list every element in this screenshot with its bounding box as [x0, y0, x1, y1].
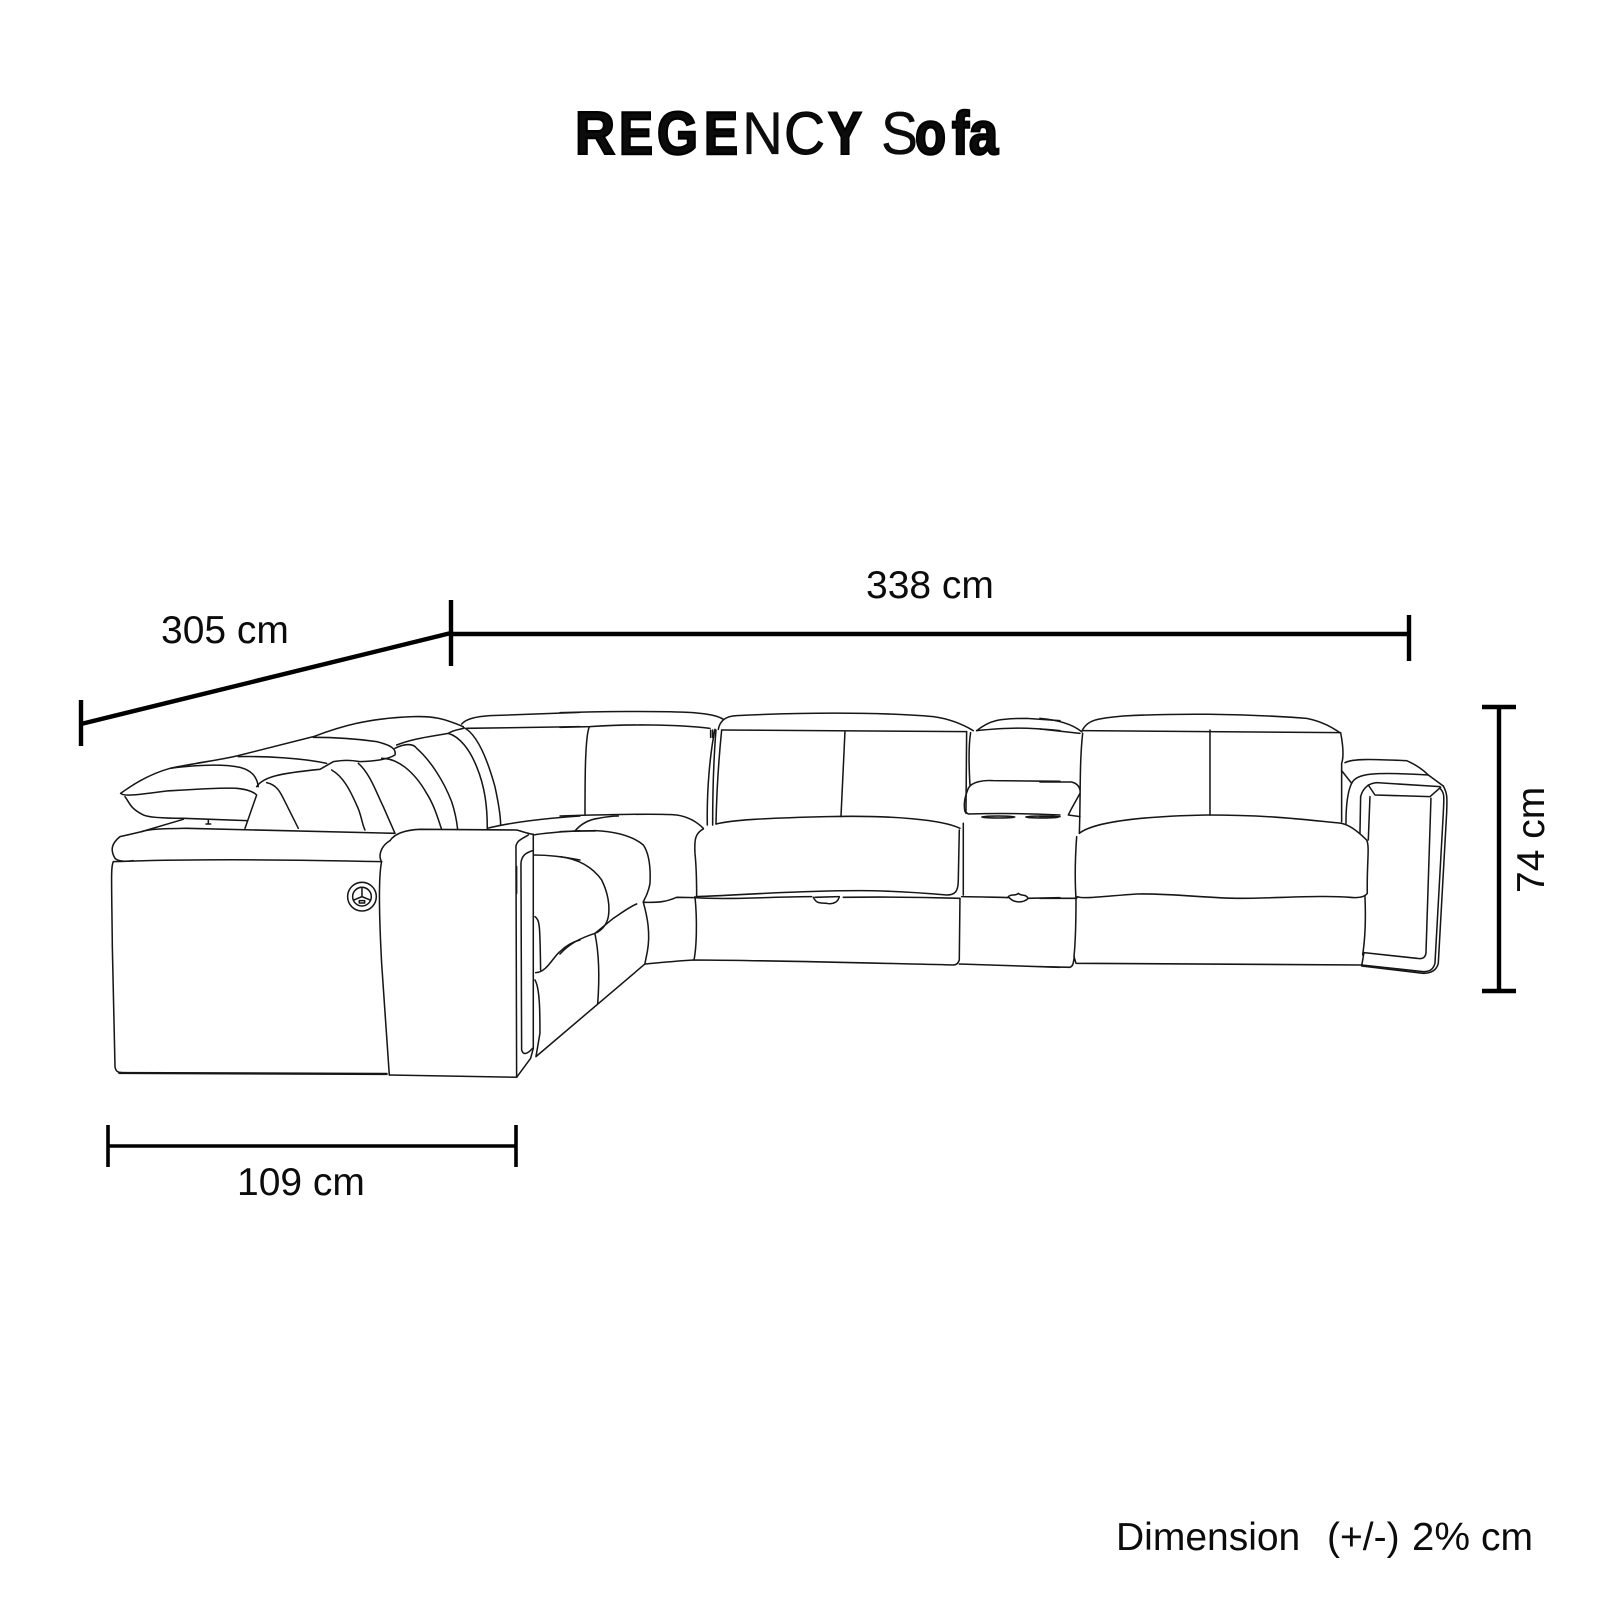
dimension: 338 cm width	[451, 564, 1409, 661]
console	[959, 718, 1060, 967]
right section	[1040, 714, 1447, 973]
title: a	[969, 100, 999, 167]
title: N	[742, 100, 783, 167]
middle section	[560, 712, 1060, 1004]
title: R	[575, 100, 615, 167]
tolerance note: 2%	[1412, 1516, 1470, 1559]
dimension: 338 cm width: 338 cm	[866, 564, 994, 607]
tolerance note: Dimension	[1116, 1516, 1300, 1559]
dimension: 305 cm depth	[81, 600, 451, 746]
right recliner	[1074, 714, 1368, 965]
dimension: 74 cm height: 74 cm	[1510, 787, 1553, 893]
arm	[389, 829, 533, 1077]
dimension: 109 cm seat depth: 109 cm	[237, 1161, 365, 1204]
title: Y	[828, 100, 862, 167]
left recliner section	[112, 712, 645, 1077]
dimension: 74 cm height	[1482, 707, 1553, 991]
console right edge	[1040, 718, 1083, 967]
title	[575, 100, 999, 167]
title: E	[619, 100, 653, 167]
headrest and back outline	[121, 712, 580, 833]
dimension: 305 cm depth: 305 cm	[161, 609, 289, 652]
tolerance note: (+/-)	[1327, 1516, 1400, 1559]
title: o	[915, 100, 946, 167]
corner seat	[487, 816, 645, 1057]
title: E	[704, 100, 738, 167]
dimension: 109 cm seat depth	[108, 1125, 516, 1204]
corner back and seat	[560, 712, 723, 1004]
tolerance note: cm	[1481, 1516, 1533, 1559]
footrest panel	[112, 819, 395, 1075]
centre recliner	[645, 713, 973, 965]
title: C	[784, 100, 825, 167]
title: f	[952, 100, 970, 167]
icon: power button	[348, 882, 376, 911]
sofa line drawing	[112, 712, 1447, 1077]
right arm	[1342, 760, 1447, 973]
title: G	[657, 100, 698, 167]
title: S	[881, 100, 918, 167]
